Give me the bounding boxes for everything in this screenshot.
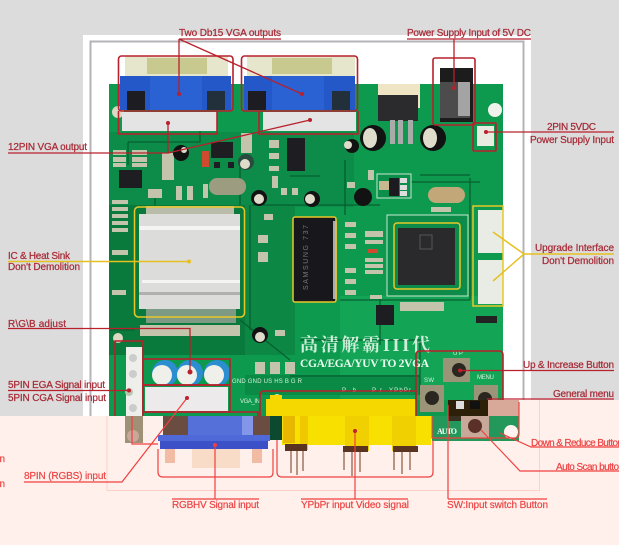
8 pin header: [145, 387, 228, 411]
mounting holes: [112, 103, 502, 402]
auto button: [437, 416, 489, 438]
label: RGBHV Signal input: [172, 443, 259, 511]
RAM chip: SAMSUNG 737: [303, 225, 310, 290]
header silk labels: Pr: [372, 388, 382, 394]
lower VGA connector: [158, 416, 270, 468]
yellow RCA connectors: [282, 416, 431, 476]
5 pin header: [125, 347, 142, 416]
red component boxes on pink: [132, 402, 519, 477]
2 pin connector: [477, 126, 494, 146]
label: SW Input switch Button: SW:Input switch Button: [447, 500, 548, 511]
red component boxes: [115, 56, 503, 416]
label: 12PIN VGA output: [8, 118, 312, 153]
circuit board: [109, 56, 503, 419]
header silk labels: GND GND US HS B G R: [232, 379, 303, 385]
small smd parts: [112, 133, 451, 374]
label: 8PIN (RGBS) input: [24, 396, 189, 482]
electrolytic capacitors: [173, 125, 446, 343]
label: IC & Heat Sink: IC & Heat Sink: [8, 251, 71, 262]
lower pink band: [0, 400, 619, 545]
label: Upgrade Interface: [493, 232, 614, 281]
label: Upgrade Interface: Don't Demolition: [542, 256, 614, 267]
RAM chip: [293, 217, 337, 302]
upgrade connectors: [478, 210, 503, 304]
auto button: AUTO: [437, 427, 457, 436]
board title: 高清解霸III代: [300, 334, 430, 355]
label: Power Supply Input of 5V DC: [407, 28, 531, 90]
label: RGBHV Signal input: RGBHV Signal input: [172, 500, 259, 511]
menu silk labels: MENU: [477, 375, 494, 381]
label: SW Input switch Button: [447, 405, 548, 511]
label: Auto Scan button: [481, 430, 619, 473]
menu silk labels: SW: [424, 378, 434, 384]
label: Up & Increase Button: Up & Increase Button: [523, 360, 614, 371]
crystals: [209, 178, 465, 203]
header silk labels: [232, 379, 411, 405]
label: Down & Reduce Button: [500, 433, 619, 449]
label: Upgrade Interface: Upgrade Interface: [535, 243, 614, 254]
label: IC & Heat Sink: Don't Demolition: [8, 262, 80, 273]
board title: [300, 334, 430, 370]
label: YPbPr input Video signal: [301, 429, 409, 511]
label: R\G\B adjust: [8, 319, 192, 374]
IC5: [377, 174, 411, 198]
label: 12PIN VGA output: 12PIN VGA output: [8, 142, 87, 153]
red diodes: [202, 151, 378, 253]
label: 5PIN signal inputs: 5PIN CGA Signal input: [8, 393, 106, 404]
label: Two Db15 VGA outputs: [177, 28, 304, 96]
label: General menu: [487, 389, 614, 400]
menu silk labels: [424, 351, 494, 384]
menu silk labels: UP: [453, 351, 463, 357]
power jack: [440, 68, 473, 122]
heat sink: [139, 206, 240, 323]
label: Power Supply Input of 5V DC: Power Supply Input of 5V DC: [407, 28, 531, 39]
buttons upper: [420, 358, 498, 412]
label: YPbPr input Video signal: YPbPr input Video signal: [301, 500, 409, 511]
board title: CGA/EGA/YUV TO 2VGA: [300, 358, 430, 370]
blue potentiometers: [152, 360, 230, 386]
label: 2PIN 5VDC Power Supply Input: Power Supply Input: [530, 135, 614, 146]
label: General menu: General menu: [553, 389, 614, 400]
label: Up & Increase Button: [458, 360, 614, 372]
label: IC & Heat Sink: [8, 251, 191, 273]
QFP chip: [387, 215, 468, 296]
mounting hole lower: [504, 425, 518, 439]
header silk labels: YPbPr: [389, 388, 411, 394]
yellow connectors upper: [266, 395, 416, 417]
label: 5PIN signal inputs: [8, 380, 131, 404]
label: 5PIN signal inputs: 5PIN EGA Signal input: [8, 380, 105, 391]
clipped left labels: [0, 454, 5, 490]
lower board strip: [125, 416, 519, 443]
header silk labels: Pb: [342, 388, 357, 394]
label: 8PIN (RGBS) input: 8PIN (RGBS) input: [24, 471, 106, 482]
label: 2PIN 5VDC Power Supply Input: [484, 122, 614, 146]
header silk labels: VGA_IN: [240, 399, 260, 405]
label: Two Db15 VGA outputs: Two Db15 VGA outputs: [179, 28, 281, 39]
yellow component boxes: [134, 206, 503, 317]
VGA connector right: [244, 56, 355, 110]
12pin headers: [122, 112, 356, 131]
regulator IC3: [378, 84, 420, 144]
label: 2PIN 5VDC Power Supply Input: 2PIN 5VDC: [547, 122, 596, 133]
label: R\G\B adjust: R\G\B adjust: [8, 319, 66, 330]
VGA connector left: [120, 56, 231, 110]
chips: [119, 138, 497, 325]
